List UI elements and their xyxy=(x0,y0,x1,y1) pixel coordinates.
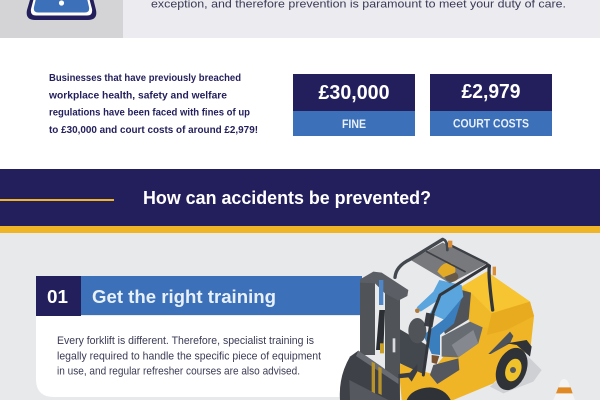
icon: warning sign xyxy=(27,0,96,20)
panel: prevention steps background xyxy=(0,233,600,400)
text block: fines summary: workplace health, safety and welfare xyxy=(48,90,227,102)
text block: fines summary xyxy=(48,73,258,136)
stat card: court costs xyxy=(430,74,552,136)
rear wheel xyxy=(490,343,534,395)
step description: in use, and regular refresher courses are also advised. xyxy=(57,366,300,378)
section band: heading xyxy=(0,169,600,233)
panel: step 01 xyxy=(36,276,362,397)
step heading: Get the right training xyxy=(92,287,276,307)
text block: fines summary: Businesses that have previously breached xyxy=(49,73,241,84)
shadow xyxy=(490,355,542,393)
steering wheel xyxy=(408,318,426,343)
stat card: fine: £30,000 xyxy=(318,82,390,104)
step description xyxy=(57,335,321,378)
step description: Every forklift is different. Therefore, specialist training is xyxy=(57,335,314,347)
fork carriage xyxy=(340,351,400,400)
heading: How can accidents be prevented? xyxy=(143,188,431,208)
seat and engine cover xyxy=(442,322,483,357)
forklift body xyxy=(398,272,534,400)
text block: fines summary: to £30,000 and court costs of around £2,979! xyxy=(49,125,258,136)
cab floor and footwell xyxy=(398,328,427,374)
mast xyxy=(360,272,408,400)
stat card: fine: FINE xyxy=(342,117,366,131)
front wheel xyxy=(407,387,451,400)
stat card: court costs: COURT COSTS xyxy=(453,116,529,130)
text block: fines summary: regulations have been faced with fines of up xyxy=(49,108,250,118)
driver xyxy=(415,271,463,364)
panel: duty of care intro xyxy=(0,0,600,38)
step description: legally required to handle the specific piece of equipment xyxy=(57,350,321,362)
stat card: fine xyxy=(293,74,415,136)
step number: 01 xyxy=(47,287,68,307)
stat card: court costs: £2,979 xyxy=(462,81,520,103)
icon: traffic cone xyxy=(553,379,575,400)
roof guard xyxy=(395,239,493,375)
illustration: forklift xyxy=(340,239,542,400)
